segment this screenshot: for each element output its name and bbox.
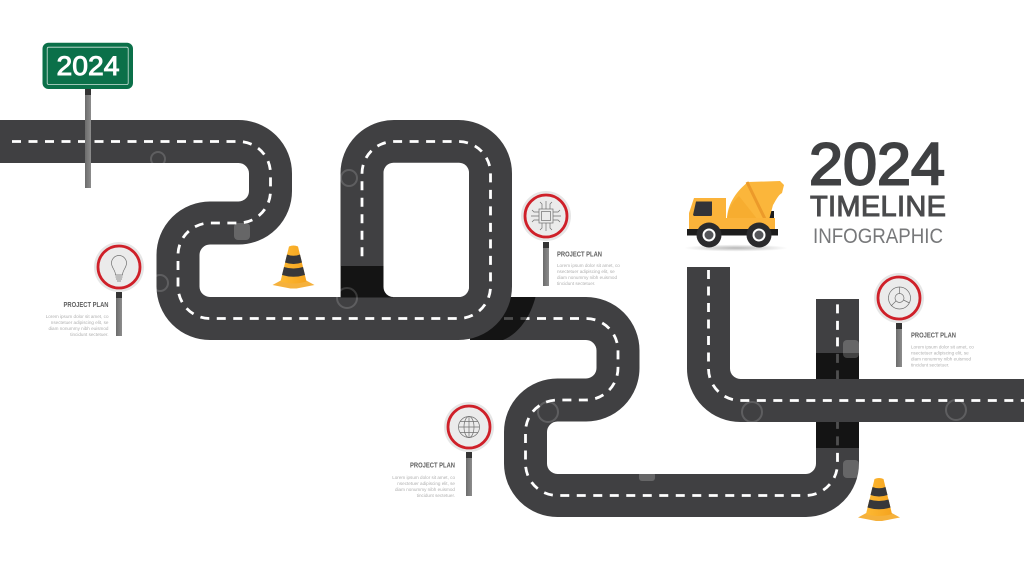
label: project plan 2: Lorem ipsum dolor sit amet, co [557, 263, 620, 268]
label: project plan 1: PROJECT PLAN [64, 302, 108, 309]
green 2024 road sign on post [42, 43, 133, 188]
label: project plan 3: Lorem ipsum dolor sit amet, co [392, 475, 455, 480]
icon: light bulb [112, 256, 126, 281]
label: project plan 1: diam nonummy nibh euismod [48, 326, 109, 331]
label: project plan 3: PROJECT PLAN [410, 462, 455, 470]
traffic cone near the 4 [858, 478, 900, 521]
milestone 4: donut chart sign and text [874, 273, 974, 368]
label: project plan 3 [392, 462, 455, 498]
traffic cone near the 2 [272, 246, 314, 288]
milestone 3: globe sign and text [392, 402, 494, 498]
label: project plan 2: tincidunt sectetuer. [557, 281, 595, 286]
title: 2024 timeline infographic [809, 132, 946, 248]
label: project plan 2: nsectetuer adipiscing elit, se [557, 269, 615, 274]
milestone 2: chip sign and text [521, 191, 620, 286]
title: 2024 timeline infographic: INFOGRAPHIC [813, 225, 943, 248]
label: project plan 2: diam nonummy nibh euismod [557, 275, 617, 280]
icon: globe [458, 416, 480, 438]
label: project plan 4: PROJECT PLAN [911, 332, 956, 340]
label: project plan 3: nsectetuer adipiscing elit, se [397, 481, 455, 486]
label: project plan 3: diam nonummy nibh euismod [395, 487, 455, 492]
label: project plan 4: nsectetuer adipiscing elit, se [911, 350, 969, 356]
icon: donut chart [888, 287, 910, 309]
icon: microchip [531, 201, 561, 231]
label: project plan 1 [46, 302, 109, 337]
road segment: middle section from the 0 loop down to the lower bend and up behind the 4 [470, 297, 859, 496]
milestone 1: light bulb sign and text [46, 242, 144, 337]
label: project plan 1: nsectetuer adipiscing elit, se [51, 320, 109, 325]
title: 2024 timeline infographic: TIMELINE [810, 191, 946, 223]
label: project plan 4: diam nonummy nibh euismod [911, 356, 971, 362]
label: project plan 1: Lorem ipsum dolor sit amet, co [46, 314, 109, 319]
label: project plan 2 [557, 252, 620, 286]
label: project plan 1: tincidunt sectetuer. [70, 332, 108, 337]
label: project plan 4 [911, 332, 974, 368]
road segment: first section forming the digits 2 and 0 [0, 142, 490, 318]
green 2024 road sign on post: 2024 [56, 51, 120, 81]
watermark marks [151, 152, 966, 481]
label: project plan 4: Lorem ipsum dolor sit amet, co [911, 344, 974, 350]
road segment: final section forming the digit 4 [708, 267, 1024, 400]
title: 2024 timeline infographic: 2024 [809, 132, 945, 198]
label: project plan 3: tincidunt sectetuer. [417, 493, 455, 498]
label: project plan 2: PROJECT PLAN [557, 252, 602, 258]
label: project plan 4: tincidunt sectetuer. [911, 362, 949, 368]
cement mixer truck [684, 181, 788, 252]
